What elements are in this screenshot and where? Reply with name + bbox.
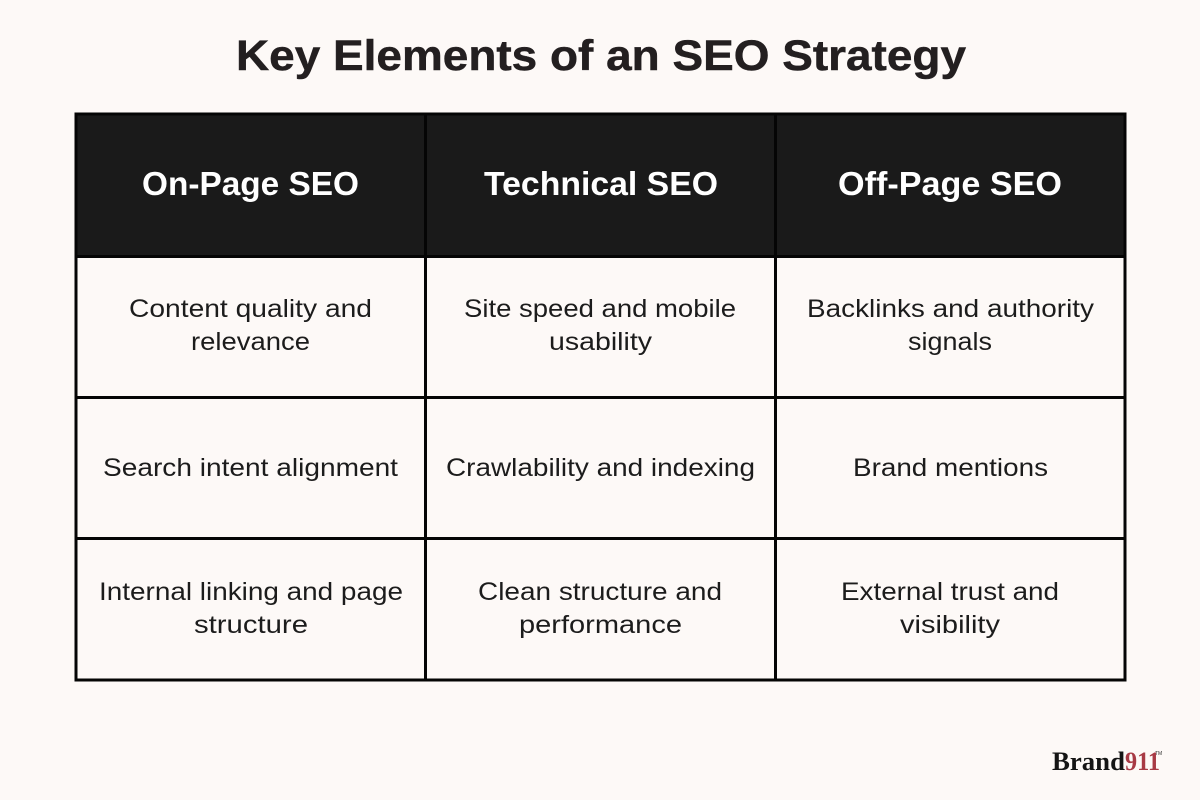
row 1 cell 2: [464, 295, 736, 356]
row 1 cell 1: [129, 295, 372, 356]
column heading: Technical SEO: Technical SEO: [484, 165, 718, 202]
row 2 cell 2: Crawlability and indexing: [446, 454, 755, 482]
row 1 cell 2: usability: [549, 328, 653, 356]
column heading: Off-Page SEO: Off-Page SEO: [838, 165, 1062, 202]
row 2 cell 3: Brand mentions: [853, 454, 1048, 482]
row 3 cell 1: Internal linking and page: [99, 578, 403, 606]
row 3 cell 3: [841, 578, 1059, 639]
row 1 cell 3: [807, 295, 1095, 356]
table header row: [76, 114, 1125, 256]
logo: Brand911: [1052, 747, 1162, 776]
row 3 cell 2: performance: [519, 611, 682, 639]
row 3 cell 1: [99, 578, 403, 639]
row 1 cell 3: signals: [908, 328, 992, 356]
logo: Brand911: TM: [1155, 751, 1162, 757]
row 2 cell 1: Search intent alignment: [103, 454, 398, 482]
row 1 cell 3: Backlinks and authority: [807, 295, 1095, 323]
row 3 cell 2: Clean structure and: [478, 578, 722, 606]
row 3 cell 3: visibility: [900, 611, 1001, 639]
row 1 cell 2: Site speed and mobile: [464, 295, 736, 323]
logo: Brand911: Brand: [1052, 747, 1126, 776]
row 3 cell 1: structure: [194, 611, 308, 639]
row 3 cell 2: [478, 578, 722, 639]
SEO strategy table: [76, 114, 1125, 680]
row 1 cell 1: relevance: [191, 328, 310, 356]
column heading: On-Page SEO: On-Page SEO: [142, 165, 359, 202]
logo: Brand911: 911: [1125, 747, 1160, 776]
title: Key Elements of an SEO Strategy: [236, 32, 966, 80]
row 3 cell 3: External trust and: [841, 578, 1059, 606]
row 1 cell 1: Content quality and: [129, 295, 372, 323]
